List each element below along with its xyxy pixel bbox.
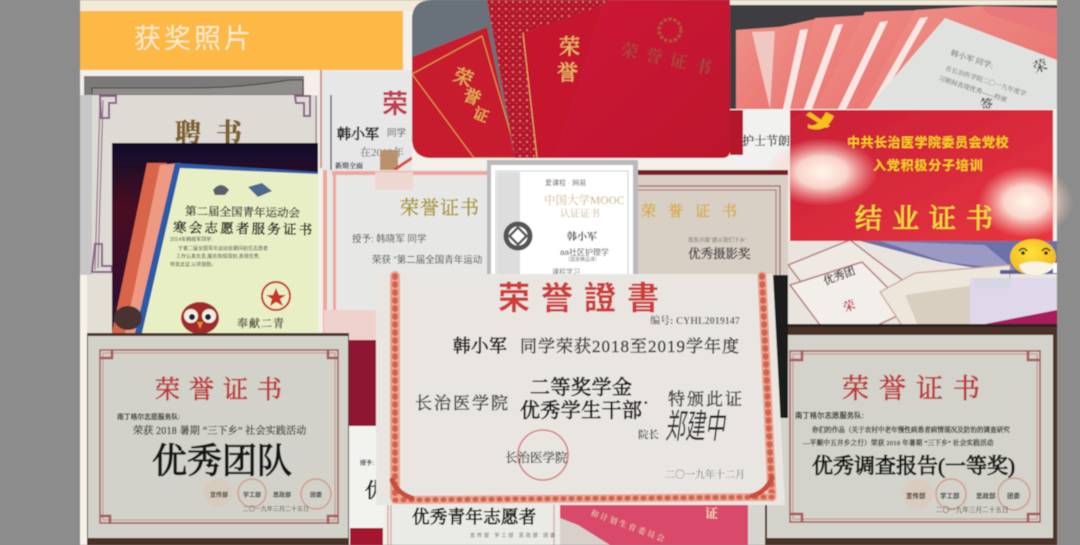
signature: 郑建中 <box>664 408 729 445</box>
panel: 荣誉 signed certificate: 荣 <box>382 89 408 119</box>
panel: 优秀团队 certificate: 宣传部 <box>210 491 228 499</box>
award names: 二等奖学金 <box>530 376 632 399</box>
panel: pile of pink certificates: 在长治医学院二〇一九年度学 <box>944 63 1028 98</box>
panel: 优秀摄影奖 certificate: 优秀摄影奖 <box>688 246 751 261</box>
panel: volunteer service certificate photo: 第二届全国青年运动会 <box>185 204 301 220</box>
panel: 优秀团队 certificate <box>87 333 349 545</box>
panel: 中国大学MOOC certificate: 爱课程 · 网易 <box>545 178 586 187</box>
panel: 优秀青年志愿者 certificate <box>385 505 560 545</box>
panel: left edge strip <box>80 275 87 545</box>
panel: 中国大学MOOC certificate: （国家精品课） <box>565 256 600 263</box>
panel: 中国大学MOOC certificate: aa社区护理学 <box>560 247 609 257</box>
panel: 优秀调查报告 certificate: 学工部 <box>940 491 960 500</box>
panel: 优秀团队 certificate: 优秀团队 <box>152 442 292 481</box>
main certificate: 荣誉證書: 特颁此证 <box>668 390 744 409</box>
panel: 聘书 certificate: 聘书 <box>175 119 257 148</box>
panel: 中国大学MOOC certificate <box>487 160 638 276</box>
panel: 优秀调查报告 certificate: 荣誉证书 <box>842 374 990 404</box>
recipient: 韩小军 <box>453 336 507 356</box>
panel: 中国大学MOOC certificate: 中国大学MOOC <box>544 193 625 207</box>
panel: party school training certificate <box>766 110 1074 241</box>
panel: pile of pink certificates <box>730 5 1057 112</box>
panel: red certificate folders: 誉 <box>461 85 483 109</box>
panel: 荣誉 signed certificate: 韩小军 <box>337 126 379 143</box>
icon: owl mascot <box>181 302 219 334</box>
panel: pink-border 荣誉证书: 荣获 “第二届全国青年运动 <box>372 254 482 266</box>
panel: 中国大学MOOC certificate: 课程学习 <box>552 267 580 276</box>
panel: 荣誉 signed certificate: 新期全面 <box>335 161 363 170</box>
panel: red certificate folders <box>412 0 730 158</box>
panel: pile of white certificates with emoji <box>787 238 1058 328</box>
banner line 2: 入党积极分子培训 <box>873 158 983 173</box>
college name: 长治医学院 <box>415 394 510 413</box>
panel: 优秀调查报告 certificate: 团委 <box>1007 491 1020 500</box>
main certificate: 荣誉證書: · <box>643 393 649 412</box>
banner line 3: 结业证书 <box>855 204 1003 234</box>
panel: volunteer service certificate photo <box>112 143 322 334</box>
panel: top cream strip <box>80 0 1057 11</box>
panel: red certificate folders: 证 <box>471 105 491 126</box>
floral border <box>392 276 772 500</box>
college seal <box>505 430 568 480</box>
panel: 优秀团队 certificate: 学工部 <box>243 491 261 499</box>
panel: pile of pink certificates: 荣 <box>1031 56 1050 77</box>
serial number: 编号: CYHL2019147 <box>650 314 740 327</box>
banner line 1: 中共长治医学院委员会党校 <box>847 135 1009 150</box>
panel: volunteer service certificate photo: 特发此证,以资鼓励。 <box>170 261 216 268</box>
panel: 优秀团队 certificate: 团委 <box>310 491 322 499</box>
signature: 院长 <box>638 428 659 441</box>
icon: hammer and sickle <box>806 112 834 130</box>
panel: 优秀摄影奖 certificate <box>638 168 788 275</box>
icon: grinning emoji <box>1010 239 1056 275</box>
heading banner: 获奖照片: 获奖照片 <box>134 24 254 54</box>
panel: 优秀调查报告 certificate: 宣传部 <box>906 491 926 500</box>
panel: pink-border 荣誉证书: 授予: 韩晓军 同学 <box>352 233 426 245</box>
panel: 优秀团队 certificate: 荣获 2018 暑期 “三下乡” 社会实践活动 <box>133 424 306 437</box>
panel: red family-planning certificate: 和计划生育委员会 <box>589 507 668 544</box>
panel: red family-planning certificate <box>560 505 765 545</box>
panel: 优秀调查报告 certificate: 二〇一九年三月二十五日 <box>936 505 1009 514</box>
panel: dark red background blocks <box>340 340 386 545</box>
panel: 荣誉 signed certificate <box>320 70 412 170</box>
panel: 优秀团队 certificate: 二〇一九年三月二十五日 <box>243 505 309 513</box>
panel: 优秀调查报告 certificate: 思政部 <box>976 491 996 500</box>
panel: 优秀摄影奖 certificate: 我系开展“建从我们下乡” <box>688 236 747 244</box>
panel: 优秀调查报告 certificate: 南丁格尔志愿服务队: <box>795 411 864 420</box>
college seal: 长治医学院 <box>505 451 568 465</box>
panel: pink-border 荣誉证书 <box>323 170 487 340</box>
panel: red certificate folders: 荣誉证书 <box>619 39 721 80</box>
panel: red family-planning certificate: 证 <box>705 506 718 521</box>
panel: 中国大学MOOC certificate: 韩小军 <box>567 230 597 243</box>
main certificate: 荣誉證書 <box>376 274 785 505</box>
panel: 聘书 certificate <box>80 76 318 333</box>
panel: volunteer service certificate photo: 奉献二青 <box>237 316 285 330</box>
panel: 优秀团队 certificate: 思政部 <box>273 491 291 499</box>
panel: 优秀调查报告 certificate: —平顺中五井乡之行）荣获 2018 年暑期 “三下乡” 社会实践活动 <box>802 438 994 447</box>
panel: volunteer service certificate photo: 工作认真负责,服务热情周到,表现优秀, <box>176 253 260 260</box>
panel: black gap beside main certificate <box>770 275 788 418</box>
panel: red certificate folders: 荣 <box>559 35 580 59</box>
heading banner: 获奖照片 <box>80 11 403 70</box>
panel: 护士节朗诵 certificate: 护士节朗诵 <box>742 133 802 148</box>
panel: red certificate folders: 荣 <box>450 64 476 92</box>
panel: pile of pink certificates: 签 <box>980 97 993 112</box>
main certificate: 荣誉證書: 同学荣获2018至2019学年度 <box>520 336 740 356</box>
panel: volunteer service certificate photo: 寒会志愿者服务证书 <box>173 219 315 237</box>
panel: 优秀团队 certificate: 荣誉证书 <box>155 376 291 404</box>
date: 二〇一九年十二月 <box>665 468 745 481</box>
panel: pink-border 荣誉证书: 荣誉证书 <box>400 197 480 219</box>
panel: pile of white certificates with emoji: 荣 <box>841 297 857 315</box>
certificate title: 荣誉證書 <box>498 280 670 316</box>
panel: dark red background blocks: 授予: <box>360 459 374 467</box>
panel: 优秀团队 certificate: 南丁格尔志愿服务队: <box>117 412 180 421</box>
panel: 优秀调查报告 certificate: 你们的作品（关于农村中老年慢性病患者病情现况及防治的调查研究 <box>812 425 1010 434</box>
panel: 优秀调查报告 certificate: 优秀调查报告(一等奖) <box>812 454 1015 478</box>
logos <box>213 183 272 197</box>
panel: pile of pink certificates: 韩小军 同学: <box>949 47 995 71</box>
panel: 优秀青年志愿者 certificate: 宣传部 学工部 思政部 团委 <box>470 532 557 539</box>
panel: 优秀调查报告 certificate <box>765 327 1057 545</box>
panel: 优秀青年志愿者 certificate: 优秀青年志愿者 <box>412 507 537 527</box>
panel: 护士节朗诵 certificate <box>730 110 802 167</box>
main certificate: 荣誉證書: 优秀学生干部 <box>520 399 642 422</box>
panel: 荣誉 signed certificate: 在2019年 <box>360 145 404 159</box>
panel: red certificate folders: 誉 <box>557 61 578 85</box>
panel: pile of white certificates with emoji: 优秀团 <box>821 263 857 288</box>
panel: 荣誉 signed certificate: 同学 <box>387 127 406 139</box>
panel: volunteer service certificate photo: 于第二届全国青年运动会期间担任志愿者 <box>178 245 268 252</box>
panel: 中国大学MOOC certificate: 认证证书 <box>560 207 600 220</box>
panel: dark red background blocks: 优 <box>365 479 385 502</box>
panel: 优秀摄影奖 certificate: 荣誉证书 <box>641 202 749 220</box>
panel: volunteer service certificate photo: 2014年韩晓军同学: <box>170 236 213 243</box>
panel: pile of pink certificates: 习期间表现优秀——特颁 <box>937 73 1009 104</box>
